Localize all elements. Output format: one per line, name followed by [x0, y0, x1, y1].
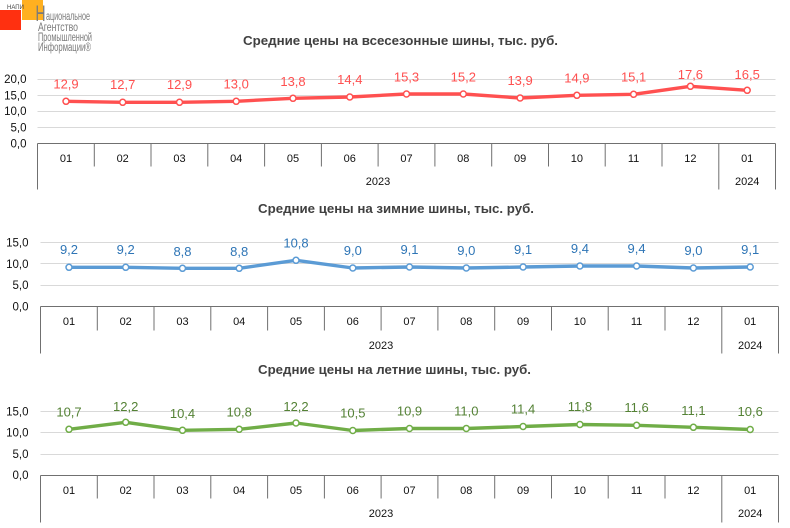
data labels: all-season: 13,0 [224, 76, 249, 92]
y axis: winter [6, 238, 28, 314]
title: all-season: Средние цены на всесезонные шины, тыс. руб. [243, 34, 558, 48]
data labels: all-season: 16,5 [735, 67, 760, 82]
y axis: summer: 5,0 [12, 449, 28, 461]
data labels: all-season: 15,3 [394, 70, 419, 84]
x axis: all-season: 2024 [735, 176, 759, 188]
y axis: summer: 0,0 [12, 470, 28, 482]
data labels: winter: 9,0 [457, 243, 475, 258]
y axis: all-season: 20,0 [4, 74, 26, 86]
data labels: all-season: 17,6 [678, 67, 703, 82]
x axis: summer: 01 [744, 485, 756, 497]
data labels: winter: 9,4 [571, 241, 589, 256]
x axis: summer: 01 [63, 485, 75, 497]
logo: ациональное [46, 11, 90, 23]
logo [0, 0, 92, 54]
y axis: winter: 15,0 [6, 238, 28, 250]
data labels: summer: 11,8 [568, 399, 592, 414]
data labels: winter: 9,1 [400, 242, 419, 257]
x axis: winter: 2024 [738, 340, 762, 352]
data labels: summer: 11,1 [681, 403, 706, 418]
x axis: all-season: 08 [457, 153, 469, 165]
chart: winter tires [6, 202, 778, 354]
data labels: summer: 10,6 [738, 404, 763, 419]
chart: all-season tires [4, 34, 776, 190]
x axis: winter: 2023 [369, 340, 393, 352]
x axis: summer [40, 476, 778, 522]
x axis: winter: 07 [403, 316, 416, 328]
data labels: winter [60, 236, 759, 259]
x axis: all-season: 01 [60, 153, 72, 165]
line series: winter [66, 257, 753, 271]
data labels: winter: 9,0 [344, 243, 362, 258]
data labels: winter: 9,4 [628, 241, 646, 256]
data labels: winter: 9,0 [684, 243, 702, 258]
x axis: all-season: 05 [287, 153, 299, 165]
x axis: winter: 05 [290, 316, 302, 328]
y axis: all-season: 10,0 [4, 106, 26, 118]
x axis: summer: 2023 [369, 508, 393, 520]
x axis: all-season: 10 [571, 153, 583, 165]
y axis: all-season: 5,0 [10, 122, 26, 134]
x axis: all-season: 01 [741, 153, 753, 165]
data labels: summer: 11,0 [454, 404, 478, 418]
x axis: all-season: 12 [684, 153, 697, 165]
logo: НАПИ [7, 5, 24, 11]
data labels: all-season: 12,9 [53, 76, 79, 92]
x axis: all-season: 02 [117, 153, 129, 165]
data labels: all-season: 12,7 [110, 77, 135, 92]
logo: Н [36, 1, 46, 26]
x axis: all-season: 07 [400, 153, 413, 165]
data labels: summer: 10,9 [397, 404, 422, 418]
data labels: all-season: 15,1 [621, 70, 646, 84]
data labels: winter: 9,2 [117, 242, 135, 257]
x axis: summer: 09 [517, 485, 529, 497]
x axis: all-season: 04 [230, 153, 242, 165]
logo: Информации® [38, 42, 91, 54]
title: winter: Средние цены на зимние шины, тыс. руб. [258, 202, 534, 216]
x axis: summer: 08 [460, 485, 472, 497]
y axis: all-season [4, 74, 26, 150]
x axis: winter: 03 [176, 316, 189, 328]
x axis: winter: 04 [233, 316, 245, 328]
x axis: summer: 03 [176, 485, 189, 497]
x axis: summer: 10 [574, 485, 586, 497]
x axis: all-season: 03 [173, 153, 186, 165]
x axis: winter: 01 [63, 316, 75, 328]
data labels: winter: 9,2 [60, 242, 78, 257]
data labels: summer [56, 399, 763, 421]
x axis: winter: 01 [744, 316, 756, 328]
data labels: all-season: 14,9 [564, 70, 590, 86]
y axis: winter: 0,0 [12, 302, 28, 314]
x axis: all-season: 11 [628, 153, 639, 165]
x axis: winter: 06 [347, 316, 359, 328]
y axis: winter: 10,0 [6, 259, 28, 271]
data labels: winter: 9,1 [514, 242, 532, 257]
chart: summer tires [6, 363, 778, 522]
y axis: summer: 15,0 [6, 406, 28, 418]
data labels: summer: 10,7 [56, 404, 82, 420]
x axis: summer: 04 [233, 485, 245, 497]
y axis: all-season: 0,0 [10, 138, 26, 150]
x axis: summer: 12 [687, 485, 700, 497]
data labels: winter: 8,8 [230, 244, 248, 259]
logo: Агентство [38, 22, 78, 34]
x axis: all-season [38, 144, 776, 190]
x axis: winter: 08 [460, 316, 472, 328]
y axis: winter: 5,0 [12, 280, 28, 292]
data labels: all-season: 12,9 [167, 77, 192, 92]
data labels: all-season [53, 67, 760, 92]
data labels: winter: 8,8 [173, 244, 192, 259]
y axis: summer [6, 406, 28, 482]
x axis: summer: 02 [120, 485, 132, 497]
data labels: summer: 10,5 [340, 406, 365, 420]
data labels: summer: 11,4 [511, 402, 535, 416]
x axis: winter: 10 [574, 316, 586, 328]
line series: all-season [63, 83, 750, 105]
line series: summer [66, 419, 753, 434]
x axis: summer: 2024 [738, 508, 762, 520]
x axis: all-season: 09 [514, 153, 526, 165]
x axis: winter [40, 306, 778, 354]
data labels: summer: 10,4 [170, 406, 195, 421]
x axis: summer: 07 [403, 485, 416, 497]
x axis: summer: 06 [347, 485, 359, 497]
x axis: summer: 05 [290, 485, 302, 497]
data labels: summer: 12,2 [113, 399, 138, 414]
data labels: winter: 9,1 [741, 242, 759, 257]
data labels: all-season: 13,8 [280, 74, 306, 89]
x axis: all-season: 06 [344, 153, 356, 165]
data labels: summer: 11,6 [624, 400, 649, 415]
data labels: summer: 10,8 [227, 404, 252, 420]
x axis: winter: 12 [687, 316, 700, 328]
title: summer: Средние цены на летние шины, тыс. руб. [258, 363, 531, 377]
data labels: all-season: 15,2 [451, 70, 476, 84]
data labels: all-season: 13,9 [507, 73, 533, 88]
x axis: summer: 11 [631, 485, 642, 497]
x axis: all-season: 2023 [366, 176, 390, 188]
data labels: winter: 10,8 [283, 236, 309, 250]
x axis: winter: 02 [120, 316, 132, 328]
logo: Промышленной [38, 32, 92, 44]
x axis: winter: 09 [517, 316, 529, 328]
x axis: winter: 11 [631, 316, 642, 328]
y axis: all-season: 15,0 [4, 90, 26, 102]
data labels: all-season: 14,4 [337, 72, 362, 87]
data labels: summer: 12,2 [283, 399, 309, 414]
y axis: summer: 10,0 [6, 428, 28, 440]
